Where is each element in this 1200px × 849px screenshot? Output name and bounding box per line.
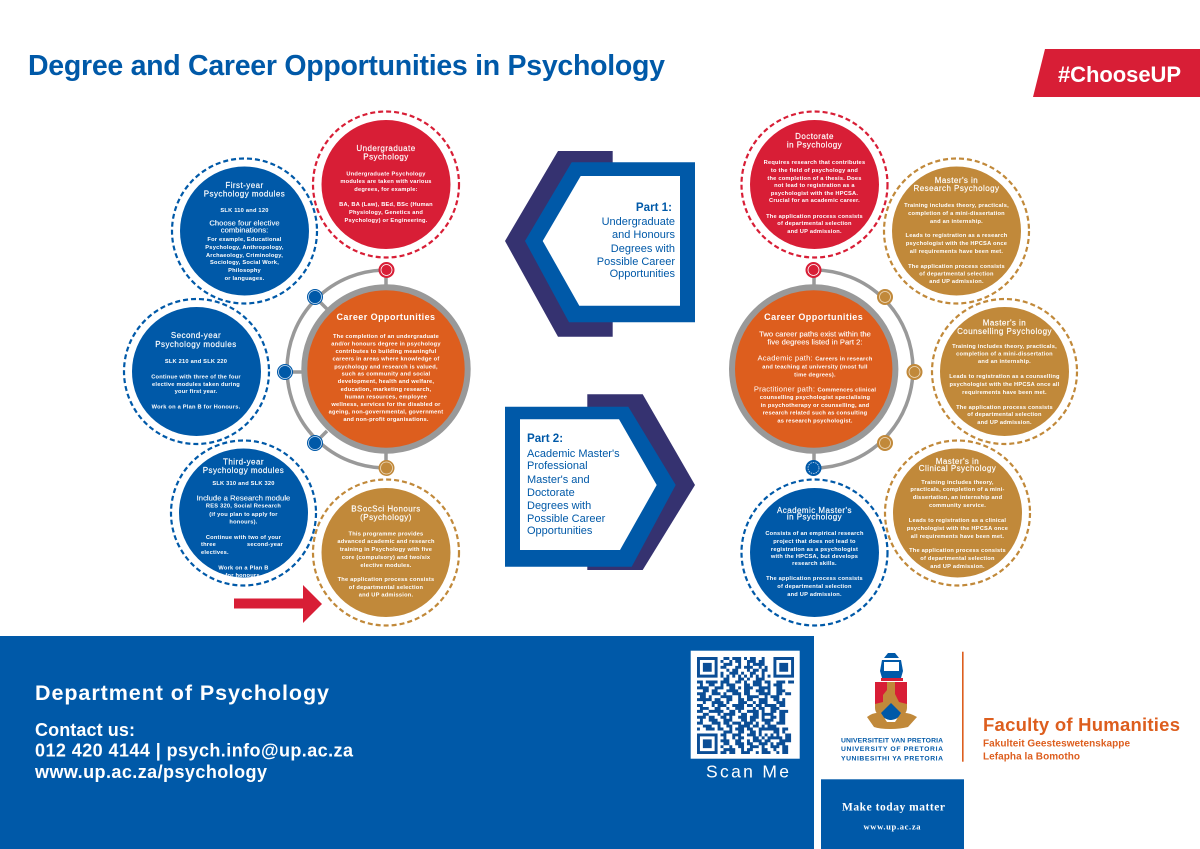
panel: academic master's [742, 480, 888, 626]
badge: #ChooseUP [1033, 49, 1200, 97]
text: research body: psychologist with the HPCSA once [906, 241, 1007, 247]
text: part 2 label: Doctorate [527, 487, 575, 499]
text: phone and email: 012 420 4144 | psych.info@up.ac.za [35, 740, 354, 760]
text: research body: of departmental selection [919, 272, 994, 278]
text: career paths intro: Two career paths exist within the [759, 330, 871, 338]
text: honours body: This programme provides [349, 532, 423, 538]
text: clinical body: dissertation, an internship and [913, 495, 1003, 501]
text: career body: The completion of an undergraduate [333, 334, 439, 340]
text: third-year body: Work on a Plan B [218, 566, 269, 572]
text: research body: Leads to registration as a research [906, 233, 1008, 239]
text: academic master's body: research skills. [792, 561, 837, 567]
panel: first-year modules [172, 158, 317, 304]
text: faculty afrikaans: Fakulteit Geesteswetenskappe [983, 738, 1130, 750]
text: counselling body: and an internship. [978, 359, 1031, 365]
panel: doctorate [742, 112, 888, 258]
text: career body: ageing, non-governmental, government [329, 410, 443, 416]
text: honours body: and UP admission. [359, 592, 413, 598]
text: academic path: time degrees). [794, 372, 836, 378]
panel: right career opportunities [732, 287, 895, 451]
text: honours body: core (compulsory) and two/six [342, 555, 431, 561]
node: first-year [307, 289, 323, 305]
arrow: red to honours [234, 585, 322, 623]
text: part 2 label: Opportunities [527, 525, 593, 537]
text: second-year body: SLK 210 and SLK 220 [165, 359, 227, 365]
text: career body: wellness, services for the disabled or [330, 402, 441, 408]
text: honours body: The application process consists [338, 577, 434, 583]
text: practitioner path: counselling psychologist specialising [760, 395, 871, 401]
text: academic path: and teaching at university (most full [762, 364, 868, 370]
heading: clinical: Master's in [936, 457, 979, 466]
text: undergraduate body: Physiology, Genetics and [349, 210, 423, 216]
text: first-year body: or languages. [225, 276, 265, 282]
text: clinical body: of departmental selection [920, 556, 995, 562]
text: clinical body: practicals, completion of a mini- [910, 487, 1005, 493]
text: counselling body: The application process consists [956, 405, 1053, 411]
heading: undergraduate: Undergraduate [356, 144, 416, 153]
text: undergraduate body: degrees, for example: [354, 187, 418, 193]
text: clinical body: community service. [929, 503, 986, 509]
node: second-year [277, 364, 293, 380]
text: career body: such as community and social [342, 372, 431, 378]
text: research body: all requirements have been met. [910, 249, 1003, 255]
footer: blue band [0, 636, 814, 849]
text: third-year body: honours). [229, 520, 258, 526]
text: research module: Include a Research module [197, 494, 290, 502]
text: research body: Training includes theory, practicals, [904, 203, 1009, 209]
text: website small: www.up.ac.za [864, 822, 921, 832]
node: academic master's [806, 460, 822, 476]
arrow: part 2 [505, 394, 695, 570]
text: part 2 label: Professional [527, 460, 588, 472]
node: doctorate [806, 262, 822, 278]
node: honours [378, 460, 394, 476]
arrow: part 1 [505, 151, 695, 337]
panel: make today matter [821, 779, 964, 849]
text: third-year body: (if you plan to apply for [209, 512, 278, 518]
text: third-year electives line: three [201, 542, 216, 548]
text: practitioner path: as research psychologist. [777, 418, 853, 424]
heading: honours: BSocSci Honours [351, 504, 421, 514]
node: research master's [877, 289, 893, 305]
text: part 1 label: Undergraduate [602, 216, 675, 228]
text: undergraduate body: Undergraduate Psychology [346, 172, 426, 178]
icon: ship [880, 653, 903, 681]
heading: academic master's: in Psychology [787, 512, 842, 522]
text: counselling body: Training includes theory, practicals, [952, 344, 1057, 350]
text: doctorate body: Requires research that contributes [764, 160, 865, 166]
panel: master's in research psychology [884, 158, 1029, 304]
text: website: www.up.ac.za/psychology [34, 762, 267, 782]
text: part 2 label: Academic Master's [527, 448, 620, 460]
text: honours body: training in Psychology with five [340, 547, 432, 553]
text: faculty name: Faculty of Humanities [983, 714, 1180, 735]
text: faculty sepedi: Lefapha la Bomotho [983, 752, 1080, 762]
text: first-year body: Sociology, Social Work, [210, 260, 279, 266]
badge: #ChooseUP: #ChooseUP [1058, 62, 1181, 87]
panel: master's in clinical psychology [885, 440, 1030, 586]
node: third-year [307, 435, 323, 451]
heading: research: Master's in [935, 176, 978, 185]
panel: third-year modules [171, 440, 316, 586]
text: second-year body: elective modules taken during [152, 382, 240, 388]
text: clinical body: Leads to registration as a clinical [909, 518, 1006, 524]
icon: scroll [867, 713, 917, 729]
text: first-year codes: SLK 110 and 120 [220, 208, 269, 214]
text: clinical body: The application process consists [909, 548, 1006, 554]
logo: university crest [867, 653, 917, 729]
text: research body: and UP admission. [929, 279, 984, 285]
heading: third-year: Psychology modules [203, 466, 284, 475]
text: undergraduate body: Psychology) or Engineering. [344, 218, 428, 224]
text: university name: UNIVERSITY OF PRETORIA [841, 746, 943, 753]
text: part 1 label: Opportunities [610, 268, 675, 280]
text: doctorate body: the completion of a thesis. Does [767, 176, 862, 182]
heading: clinical: Clinical Psychology [919, 464, 996, 473]
text: honours body: elective modules. [360, 563, 412, 569]
text: part 1 label: Possible Career [597, 256, 675, 268]
diagram: right career hub connectors [814, 270, 913, 468]
text: doctorate body: Crucial for an academic career. [769, 198, 860, 204]
text: career paths intro: five degrees listed in Part 2: [767, 338, 863, 346]
text: research body: completion of a mini-dissertation [908, 211, 1005, 217]
text: doctorate body: to the field of psychology and [771, 168, 858, 174]
text: honours body: advanced academic and research [337, 539, 435, 545]
text: part 1 label: Part 1: [636, 201, 672, 214]
text: counselling body: of departmental selection [967, 412, 1042, 418]
heading: second-year: Second-year [171, 331, 221, 340]
heading: first-year: First-year [225, 181, 264, 190]
text: academic path: Academic path: Careers in research [757, 354, 873, 362]
text: academic master's body: Consists of an empirical research [765, 531, 864, 537]
text: university name: YUNIBESITHI YA PRETORIA [841, 756, 943, 762]
text: part 2 label: Master's and [527, 474, 590, 486]
text: academic master's body: The application process consists [766, 576, 863, 582]
text: career body: human resources, employee [345, 394, 427, 400]
text: third-year body: RES 320, Social Research [206, 504, 281, 510]
text: counselling body: psychologist with the HPCSA once all [949, 382, 1060, 388]
text: clinical body: Training includes theory, [921, 480, 994, 486]
text: doctorate body: of departmental selection [777, 221, 852, 227]
text: clinical body: psychologist with the HPCSA once [907, 526, 1008, 532]
text: academic master's body: and UP admission. [787, 592, 842, 598]
text: career body: contributes to building meaningful [335, 349, 437, 355]
node: counselling master's [906, 364, 922, 380]
text: counselling body: and UP admission. [977, 420, 1032, 426]
text: doctorate body: The application process consists [766, 214, 863, 220]
heading: career opportunities: Career Opportunities [336, 312, 436, 322]
text: practitioner path: in psychotherapy or counselling, and [761, 403, 870, 409]
text: career body: education, marketing research, [341, 387, 432, 393]
panel: left career opportunities [304, 287, 468, 451]
heading: honours: (Psychology) [360, 513, 412, 522]
text: part 2 label: Part 2: [527, 432, 563, 445]
text: slogan: Make today matter [842, 802, 945, 814]
heading: third-year: Third-year [223, 458, 264, 466]
text: first-year body: Philosophy [228, 268, 262, 274]
text: academic master's body: with the HPCSA, but develops [770, 554, 858, 560]
text: part 1 label: and Honours [612, 229, 675, 241]
text: part 2 label: Degrees with [527, 500, 591, 512]
text: contact label: Contact us: [35, 720, 135, 740]
text: first-year body: Psychology, Anthropology, [205, 245, 284, 251]
text: academic master's body: project that does not lead to [773, 539, 856, 545]
text: university name: UNIVERSITEIT VAN PRETORIA [841, 738, 943, 744]
text: third-year electives line: electives. [201, 550, 229, 556]
heading: undergraduate: Psychology [363, 152, 409, 162]
node: undergraduate [378, 262, 394, 278]
text: career body: and/or honours degree in psychology [331, 342, 441, 348]
text: first-year body: Archaeology, Criminology, [206, 253, 283, 259]
heading: doctorate: in Psychology [787, 140, 842, 150]
text: part 2 label: Possible Career [527, 513, 606, 525]
text: doctorate body: not lead to registration as a [774, 183, 855, 189]
heading: counselling: Master's in [983, 318, 1026, 328]
text: research body: The application process consists [908, 264, 1005, 270]
panel: master's in counselling psychology [932, 299, 1077, 444]
text: third-year body: Continue with two of your [206, 535, 282, 541]
heading: first-year: Psychology modules [204, 190, 285, 198]
heading: doctorate: Doctorate [795, 132, 834, 141]
text: research body: and an internship. [930, 219, 983, 225]
text: first-year electives heading: Choose four elective [209, 218, 280, 228]
text: part 1 label: Degrees with [611, 243, 675, 255]
text: clinical body: all requirements have been met. [911, 534, 1004, 540]
text: third-year electives line: second-year [247, 542, 283, 548]
panel: second-year modules [124, 299, 269, 444]
divider: orange rule [962, 652, 964, 762]
heading: counselling: Counselling Psychology [957, 327, 1052, 336]
heading: academic master's: Academic Master's [777, 506, 852, 515]
text: counselling body: requirements have been met. [962, 390, 1047, 396]
panel: undergraduate psychology [313, 112, 459, 258]
text: department heading: Department of Psychology [35, 681, 329, 705]
text: career body: and non-profit organisations. [343, 417, 429, 423]
heading: right career opportunities: Career Opportunities [764, 312, 863, 322]
text: career body: psychology and research is valued, [334, 364, 438, 370]
text: practitioner path: Practitioner path: Commences clinical [754, 384, 876, 394]
text: clinical body: and UP admission. [930, 564, 985, 570]
text: university name [841, 738, 943, 762]
text: honours body: of departmental selection [349, 585, 423, 591]
text: undergraduate body: BA, BA (Law), BEd, BSc (Human [339, 202, 433, 208]
text: practitioner path: research related such as consulting [763, 410, 868, 416]
node: clinical master's [877, 435, 893, 451]
text: undergraduate body: modules are taken with various [340, 179, 432, 185]
panel: BSocSci honours [313, 480, 459, 626]
icon: shield [875, 682, 907, 720]
title: Degree and Career Opportunities in Psychology [28, 50, 665, 82]
heading: research: Research Psychology [914, 184, 999, 193]
text: second-year body: Continue with three of the four [151, 374, 241, 380]
heading: second-year: Psychology modules [155, 340, 237, 349]
text: third-year codes: SLK 310 and SLK 320 [212, 481, 275, 487]
text: doctorate body: psychologist with the HPCSA. [771, 191, 858, 197]
text: career body: careers in areas where knowledge of [333, 356, 439, 362]
text: career body: development, health and welfare, [338, 379, 434, 385]
text: third-year body: for honours. [225, 573, 262, 579]
diagram: left career hub connectors [285, 270, 386, 468]
text: first-year electives heading: combinations: [221, 226, 268, 234]
text: doctorate body: and UP admission. [787, 229, 842, 235]
text: first-year body: For example, Educational [207, 237, 282, 243]
text: second-year body: Work on a Plan B for Honours. [152, 404, 241, 410]
text: counselling body: Leads to registration as a counselling [949, 374, 1060, 380]
QR code [691, 651, 800, 759]
text: academic master's body: of departmental selection [777, 584, 852, 590]
text: academic master's body: registration as a psychologist [771, 547, 858, 553]
text: second-year body: your first year. [175, 389, 218, 395]
text: counselling body: completion of a mini-dissertation [956, 352, 1053, 358]
text: scan me: Scan Me [706, 762, 789, 782]
